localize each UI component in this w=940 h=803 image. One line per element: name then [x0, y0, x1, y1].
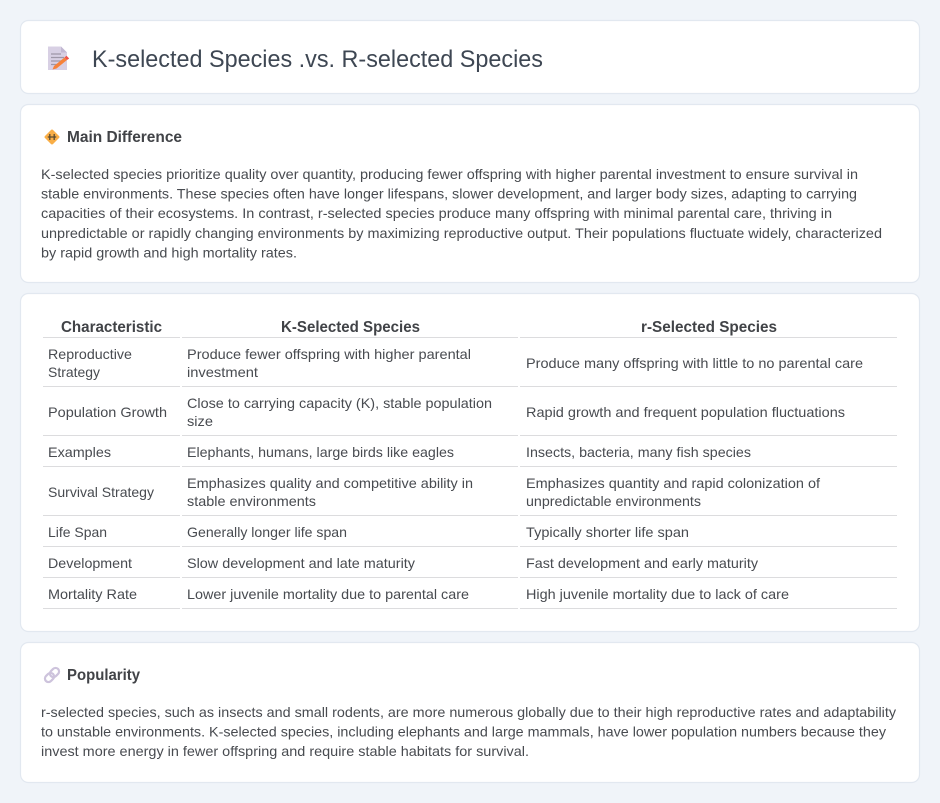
text block: main difference: by rapid growth and high mortality rates. — [41, 244, 297, 260]
table row: development: Slow development and late maturity — [187, 555, 415, 571]
table row: examples — [43, 444, 897, 466]
table row: life span: Typically shorter life span — [526, 524, 689, 540]
text block: popularity: to unstable environments. K-selected species, including elephants and large mammals, have lower population numbers because they — [41, 724, 886, 740]
table row: life span: Generally longer life span — [187, 524, 347, 540]
panel: main difference — [20, 104, 920, 282]
icon: chain link — [43, 666, 61, 684]
text block: main difference: capacities of their ecosystems. In contrast, r-selected species produce many offspring with minimal parental care, thriving in — [41, 205, 832, 221]
panel: page header — [20, 20, 920, 94]
table row: reproductive strategy: Reproductive — [48, 346, 132, 362]
table row: population growth: Close to carrying capacity (K), stable population — [187, 395, 492, 411]
heading: main difference: Main Difference — [67, 129, 182, 146]
table row: mortality rate: Lower juvenile mortality due to parental care — [187, 586, 469, 602]
table row: population growth: Rapid growth and frequent population fluctuations — [526, 404, 845, 420]
table row: reproductive strategy: Strategy — [48, 364, 100, 380]
table row: survival strategy — [43, 475, 897, 516]
panel: comparison table — [20, 294, 920, 632]
table header — [43, 319, 897, 338]
table row: development — [43, 555, 897, 578]
table row: life span: Life Span — [48, 524, 107, 540]
table row: survival strategy: stable environments — [187, 493, 316, 509]
icon: document with pencil — [48, 46, 69, 70]
table row: examples: Insects, bacteria, many fish species — [526, 444, 751, 460]
table row: reproductive strategy: Produce fewer offspring with higher parental — [187, 346, 471, 362]
text block: main difference: K-selected species prioritize quality over quantity, producing fewer offspring with higher parental investment to ensure survival in — [41, 166, 858, 182]
table row: mortality rate — [43, 586, 897, 608]
table row: survival strategy: Emphasizes quantity and rapid colonization of — [526, 475, 820, 491]
table row: mortality rate: High juvenile mortality due to lack of care — [526, 586, 789, 602]
text block: main difference — [41, 166, 882, 260]
table row: population growth: Population Growth — [48, 404, 167, 420]
table row: survival strategy: Survival Strategy — [48, 484, 154, 500]
text block: popularity: r-selected species, such as insects and small rodents, are more numerous globally due to their high reproductive rates and adaptability — [41, 704, 896, 720]
text block: popularity — [41, 704, 896, 759]
table row: mortality rate: Mortality Rate — [48, 586, 137, 602]
text block: popularity: invest more energy in fewer offspring and require stable habitats for survival. — [41, 743, 529, 759]
table row: reproductive strategy — [43, 346, 897, 386]
table row: development: Fast development and early maturity — [526, 555, 758, 571]
table row: population growth — [43, 395, 897, 436]
table row: examples: Elephants, humans, large birds like eagles — [187, 444, 454, 460]
table row: reproductive strategy: Produce many offspring with little to no parental care — [526, 355, 863, 371]
table header: Characteristic — [61, 319, 162, 336]
table row: survival strategy: unpredictable environments — [526, 493, 701, 509]
table row: life span — [43, 524, 897, 546]
text block: main difference: unpredictable or rapidly changing environments by maximizing reproductive output. Their populations fluctuate widely, characterized — [41, 225, 882, 241]
table row: reproductive strategy: investment — [187, 364, 258, 380]
table row: survival strategy: Emphasizes quality and competitive ability in — [187, 475, 473, 491]
table header: r-Selected Species — [641, 319, 777, 336]
table row: examples: Examples — [48, 444, 111, 460]
panel: popularity — [20, 642, 920, 782]
table header: K-Selected Species — [281, 319, 420, 336]
heading: popularity: Popularity — [67, 667, 140, 684]
title: K-selected Species .vs. R-selected Species — [92, 46, 543, 73]
table row: population growth: size — [187, 413, 213, 429]
icon: warning diamond — [44, 129, 60, 145]
text block: main difference: stable environments. These species often have longer lifespans, slower development, and larger body sizes, adapting to carrying — [41, 186, 857, 202]
table row: development: Development — [48, 555, 132, 571]
